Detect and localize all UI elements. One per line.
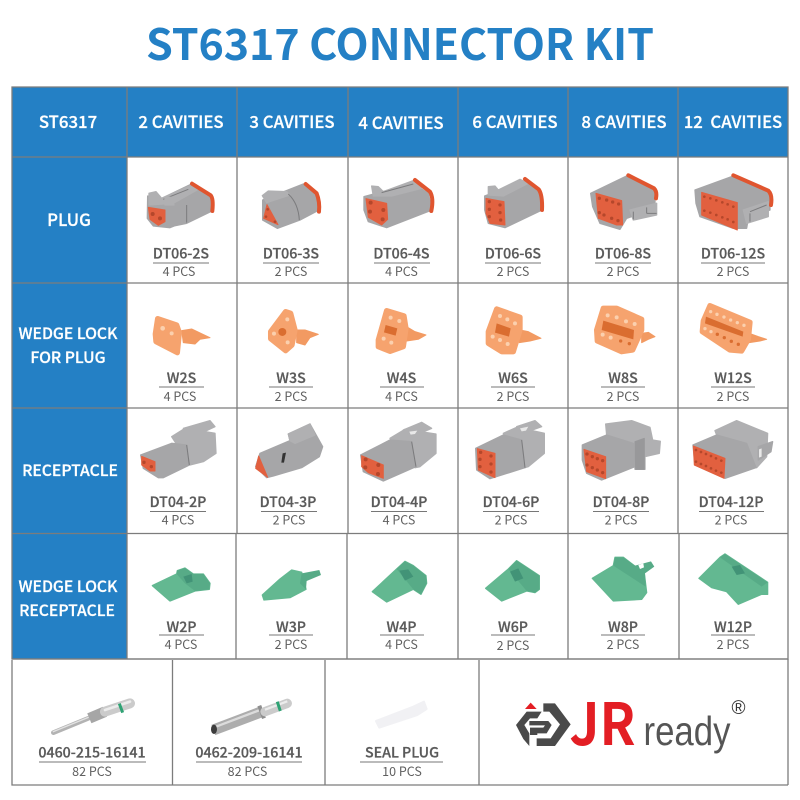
icon: DT04-3P (256, 424, 323, 478)
icon: DT04-4P (361, 422, 436, 481)
panel: seal plug (360, 702, 443, 780)
row: receptacle part numbers: 2 PCS (273, 510, 305, 528)
row: plug part numbers: DT06-12S (701, 244, 765, 264)
panel: seal plug: 10 PCS (382, 761, 422, 780)
row: wedge lock receptacle part numbers (159, 617, 755, 654)
panel: terminal 0462-209-16141: 82 PCS (228, 761, 267, 780)
row: receptacle part numbers: DT04-6P (483, 492, 539, 512)
row: wedge lock receptacle part numbers: 2 PCS (607, 634, 639, 653)
row: receptacle part numbers: 2 PCS (605, 510, 637, 528)
row: wedge lock for plug part numbers: W4S (387, 368, 417, 388)
icon: W3P (262, 570, 321, 600)
row: wedge lock for plug part numbers: 2 PCS (275, 386, 307, 405)
row: wedge lock receptacle part numbers: 4 PCS (385, 634, 418, 653)
icon: W3S (271, 312, 318, 351)
row: green wedge lock icons (152, 554, 768, 604)
row: wedge lock receptacle part numbers: W4P (387, 617, 416, 637)
row labels: WEDGE LOCK (19, 321, 118, 344)
table header labels: 2 CAVITIES (138, 109, 224, 133)
row: wedge lock receptacle part numbers: W2P (167, 617, 196, 637)
panel: blue table header and row label backgrounds (12, 87, 788, 659)
row: wedge lock receptacle part numbers: W8P (608, 617, 638, 637)
logo: JRready (516, 678, 746, 762)
panel: terminal 0460-215-16141 (38, 702, 146, 780)
row labels: RECEPTACLE (19, 598, 115, 621)
row: wedge lock receptacle part numbers: W12P (714, 617, 752, 637)
row labels: RECEPTACLE (22, 458, 118, 481)
row: plug part numbers: 2 PCS (275, 261, 307, 280)
row labels: FOR PLUG (30, 345, 106, 368)
row: receptacle part numbers: 2 PCS (495, 510, 527, 528)
icon: W2S (155, 319, 210, 353)
icon: DT04-2P (141, 421, 216, 478)
logo wordmark: JR (570, 678, 636, 762)
row: plug icons (147, 175, 771, 230)
row: plug part numbers: DT06-6S (485, 244, 541, 264)
row: wedge lock for plug part numbers: 2 PCS (497, 386, 529, 405)
row labels: PLUG (47, 207, 91, 231)
icon: W4P (372, 561, 427, 602)
row labels: WEDGE LOCK (19, 574, 118, 597)
row labels (19, 207, 118, 621)
row: plug part numbers: DT06-2S (153, 244, 209, 264)
row: wedge lock receptacle part numbers: W3P (276, 617, 306, 637)
row: wedge lock for plug part numbers: 2 PCS (717, 386, 749, 405)
row: receptacle part numbers: DT04-12P (699, 492, 763, 512)
row: plug part numbers: DT06-4S (373, 244, 430, 264)
table header labels: ST6317 (39, 109, 97, 133)
row: wedge lock for plug part numbers: W8S (608, 368, 638, 388)
icon: W8P (592, 557, 654, 601)
row: wedge lock for plug part numbers (159, 368, 755, 405)
icon: pin contact (53, 702, 130, 733)
row: wedge lock for plug part numbers: 2 PCS (607, 386, 639, 405)
icon: W12P (699, 554, 768, 604)
row: wedge lock receptacle part numbers: 2 PCS (275, 634, 307, 653)
icon: DT06-6S (485, 179, 542, 228)
row: plug part numbers: DT06-8S (595, 244, 651, 264)
row: plug part numbers: 2 PCS (497, 261, 529, 280)
row: receptacle part numbers: DT04-2P (150, 492, 206, 512)
table header labels: 6 CAVITIES (472, 109, 558, 133)
row: wedge lock for plug part numbers: W2S (167, 368, 197, 388)
row: wedge lock receptacle part numbers: 2 PCS (497, 635, 529, 654)
icon: DT04-8P (582, 421, 660, 480)
row: plug part numbers: 2 PCS (717, 261, 749, 280)
table header labels (39, 109, 782, 134)
icon: W12S (702, 306, 767, 351)
icon: socket contact (211, 701, 287, 734)
row: plug part numbers (153, 244, 765, 280)
panel: seal plug: SEAL PLUG (365, 742, 439, 762)
row: receptacle part numbers (150, 492, 764, 528)
row: receptacle part numbers: 2 PCS (715, 510, 747, 528)
panel: terminal 0462-209-16141: 0462-209-16141 (195, 742, 303, 762)
icon: DT04-12P (693, 421, 773, 478)
table header labels: 4 CAVITIES (358, 110, 444, 134)
row: orange wedge lock icons (155, 306, 767, 353)
icon: DT06-12S (695, 175, 771, 230)
icon: logo mark (516, 703, 571, 746)
icon: W8S (597, 308, 655, 352)
panel: terminal 0460-215-16141: 82 PCS (72, 761, 112, 780)
row: wedge lock for plug part numbers: W12S (714, 368, 752, 388)
icon: W4S (378, 311, 426, 351)
row: receptacle part numbers: DT04-8P (593, 492, 649, 512)
icon: seal plug (376, 702, 427, 728)
row: receptacle part numbers: 4 PCS (383, 510, 415, 528)
row: wedge lock for plug part numbers: 4 PCS (385, 386, 418, 405)
row: plug part numbers: 4 PCS (385, 261, 418, 280)
row: wedge lock receptacle part numbers: W6P (498, 617, 528, 637)
row: receptacle part numbers: 4 PCS (162, 510, 194, 528)
row: plug part numbers: 4 PCS (163, 261, 195, 280)
row: receptacle part numbers: DT04-4P (371, 492, 427, 512)
panel: terminal 0462-209-16141 (195, 701, 303, 780)
table header labels: 12 CAVITIES (684, 109, 782, 133)
row: plug part numbers: DT06-3S (263, 244, 319, 264)
row: receptacle part numbers: DT04-3P (260, 492, 316, 512)
logo: JRready: ® (732, 698, 746, 719)
icon: DT06-3S (262, 184, 319, 228)
row: wedge lock for plug part numbers: W6S (498, 368, 528, 388)
table header labels: 8 CAVITIES (581, 109, 667, 133)
panel: terminal 0460-215-16141: 0460-215-16141 (38, 742, 146, 762)
icon: W6S (488, 309, 541, 352)
row: plug part numbers: 2 PCS (607, 261, 639, 280)
logo: JRready: ready (644, 708, 731, 754)
icon: W6P (486, 561, 539, 601)
icon: DT06-4S (364, 180, 432, 228)
table header labels: 3 CAVITIES (249, 109, 335, 133)
icon: W2P (152, 568, 210, 601)
row: wedge lock receptacle part numbers: 2 PCS (717, 634, 749, 653)
icon: DT04-6P (476, 421, 544, 479)
row: wedge lock for plug part numbers: 4 PCS (164, 386, 196, 405)
row: wedge lock for plug part numbers: W3S (276, 368, 306, 388)
icon: DT06-8S (591, 175, 657, 229)
row: receptacle icons (141, 421, 773, 481)
title: ST6317 CONNECTOR KIT (146, 11, 654, 73)
row: wedge lock receptacle part numbers: 4 PCS (165, 634, 197, 653)
icon: DT06-2S (147, 184, 213, 228)
